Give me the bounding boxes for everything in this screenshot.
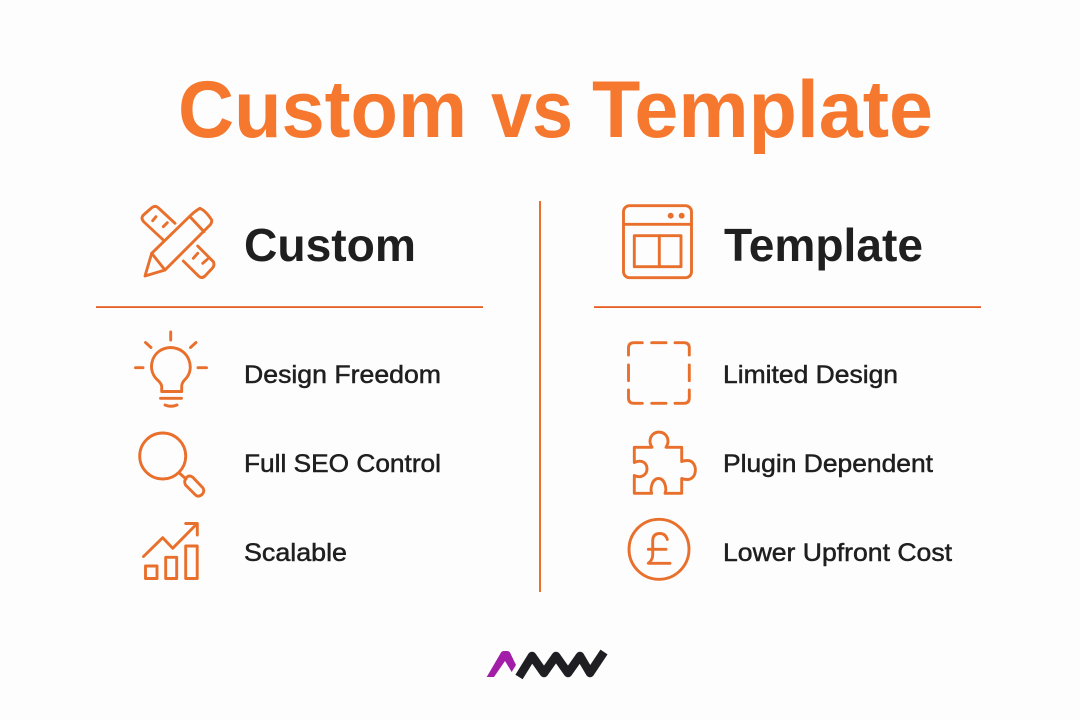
logo: black zigzag: [519, 652, 604, 677]
panel: template: [594, 206, 981, 579]
center divider: [539, 201, 541, 592]
item: lower upfront cost: Lower Upfront Cost: [723, 539, 952, 567]
title: Custom: [178, 65, 467, 155]
icon: light bulb: [136, 332, 206, 406]
rule: custom: [96, 306, 483, 308]
item: plugin dependent: Plugin Dependent: [723, 450, 933, 478]
title: vs: [491, 65, 573, 155]
icon: pencil and ruler: [142, 206, 214, 278]
logo: purple chevron: [487, 651, 516, 677]
icon: magnifying glass: [140, 433, 204, 496]
item: design freedom: Design Freedom: [244, 361, 441, 389]
item: full seo control: Full SEO Control: [244, 450, 441, 478]
icon: puzzle piece: [634, 432, 695, 493]
icon: browser window: [624, 206, 692, 278]
panel: custom: [96, 206, 483, 578]
rule: template: [594, 306, 981, 308]
heading: custom: Custom: [244, 219, 416, 271]
icon: growth chart: [144, 524, 197, 578]
item: limited design: Limited Design: [723, 361, 898, 389]
logo: [487, 651, 604, 677]
title: Template: [592, 65, 933, 155]
heading: template: Template: [724, 219, 923, 271]
icon: pound coin: [629, 519, 689, 579]
title: [178, 65, 933, 155]
item: scalable: Scalable: [244, 539, 347, 567]
icon: dashed square: [628, 343, 689, 403]
